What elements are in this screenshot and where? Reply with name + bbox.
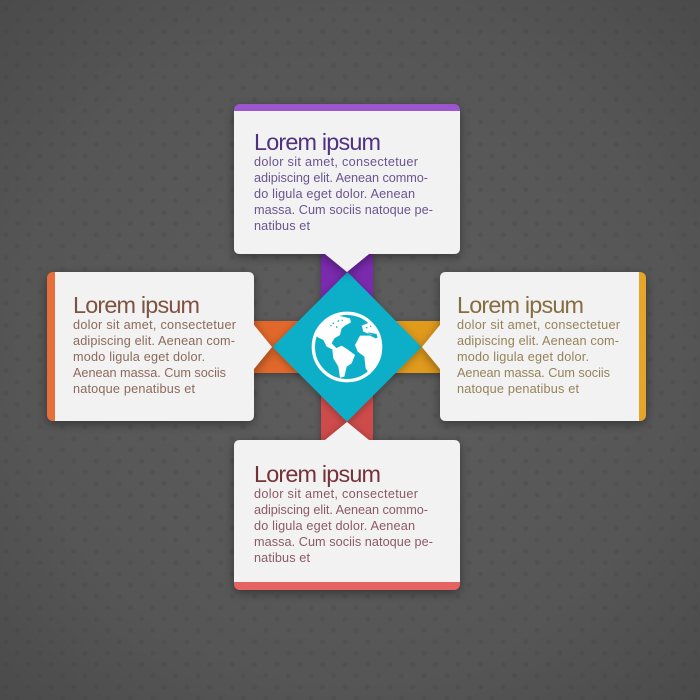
panel: bottom card [234,422,460,590]
heading: bottom card: Lorem ipsum [254,461,381,487]
heading: top card: Lorem ipsum [254,129,381,155]
text: bottom card body: dolor sit amet, consectetuer [254,487,419,501]
text: right card body: Aenean massa. Cum sociis [457,366,610,380]
ribbon: bottom red [321,347,373,444]
panel: right card [422,272,646,421]
text: top card body: massa. Cum sociis natoque pe- [254,203,433,217]
ribbon: left orange [250,321,347,373]
text: left card body: natoque penatibus et [73,382,195,396]
text: right card body: adipiscing elit. Aenean com- [457,334,619,348]
heading: left card: Lorem ipsum [73,292,200,318]
heading: right card: Lorem ipsum [457,292,584,318]
text: left card body: modo ligula eget dolor. [73,350,205,364]
panel: left card [47,272,272,421]
text: bottom card body: do ligula eget dolor. Aenean [254,519,415,533]
text: bottom card body: natibus et [254,551,310,565]
text: bottom card body: massa. Cum sociis natoque pe- [254,535,433,549]
text: left card body: Aenean massa. Cum sociis [73,366,226,380]
text: right card body: modo ligula eget dolor. [457,350,589,364]
text: right card body: natoque penatibus et [457,382,579,396]
text: left card body: adipiscing elit. Aenean com- [73,334,235,348]
text: top card body: do ligula eget dolor. Aenean [254,187,415,201]
panel: top card [234,104,460,272]
ribbon: right amber [347,321,444,373]
ribbon: top purple [321,250,373,347]
text: left card body: dolor sit amet, consectetuer [73,318,237,332]
text: top card body: natibus et [254,219,310,233]
ribbons cross [250,250,444,444]
text: right card body: dolor sit amet, consectetuer [457,318,621,332]
center diamond [273,272,421,421]
icon: globe [313,313,381,381]
text: bottom card body: adipiscing elit. Aenean commo- [254,503,428,517]
text: top card body: dolor sit amet, consectetuer [254,155,419,169]
text: top card body: adipiscing elit. Aenean commo- [254,171,428,185]
